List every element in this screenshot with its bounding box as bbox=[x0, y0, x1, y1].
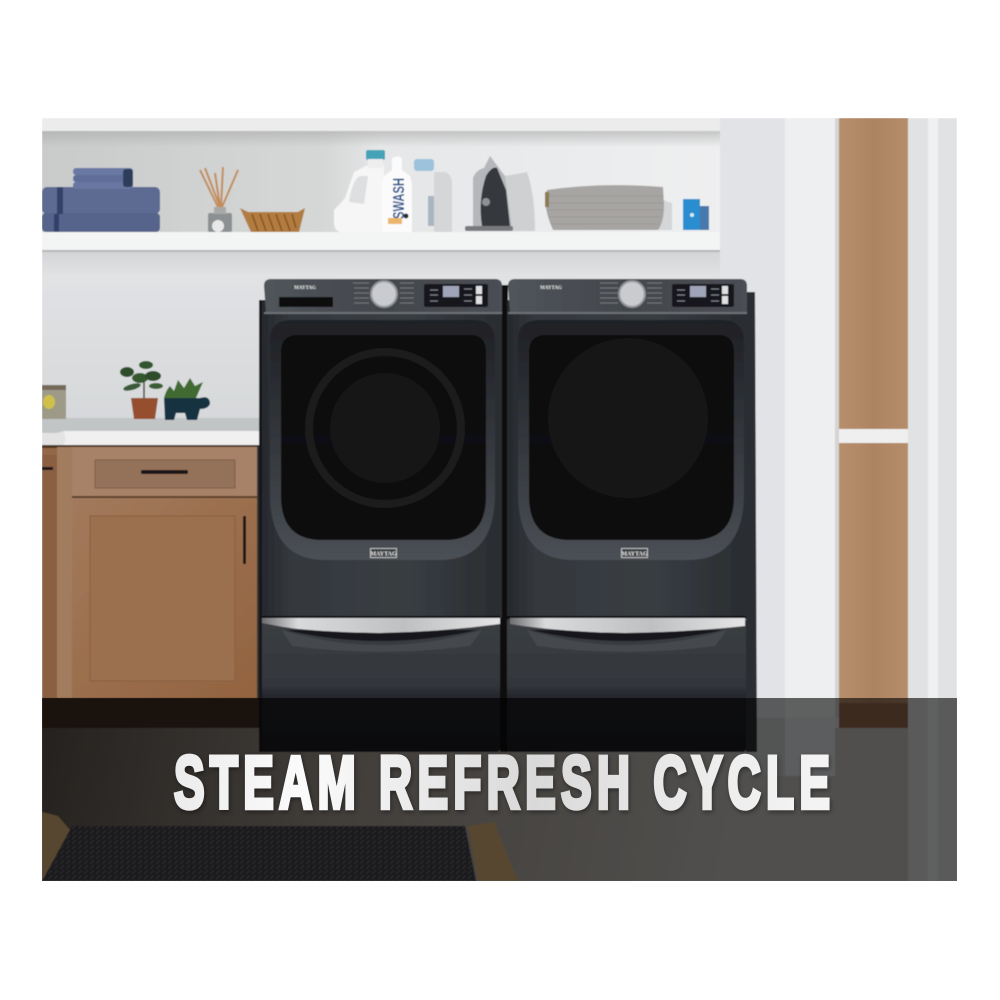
washer door glass bbox=[281, 335, 486, 540]
icon: reed diffuser bbox=[200, 167, 238, 232]
jar bbox=[42, 385, 66, 419]
washer control panel bbox=[264, 279, 502, 314]
shelf bbox=[42, 232, 720, 252]
icon: detergent bottles bbox=[334, 150, 452, 232]
dryer door glass bbox=[529, 335, 734, 540]
icon: clothes iron bbox=[465, 156, 535, 231]
photo background: wall bbox=[42, 118, 957, 881]
floor bbox=[42, 718, 908, 881]
dryer control panel bbox=[508, 279, 747, 314]
dryer badge bbox=[621, 548, 648, 558]
dryer door frame bbox=[518, 320, 744, 560]
icon: blue box bbox=[682, 198, 710, 231]
dryer bbox=[507, 279, 747, 618]
icon: folded towels bbox=[42, 168, 160, 232]
icon: grey basket bbox=[545, 185, 672, 230]
wood lower cabinets bbox=[42, 445, 262, 728]
photo scene bbox=[42, 118, 957, 881]
washer badge: MAYTAG bbox=[370, 552, 397, 558]
icon: woven basket bbox=[240, 208, 305, 232]
dryer control panel: MAYTAG bbox=[540, 286, 562, 291]
washer bbox=[262, 279, 502, 618]
washer body bbox=[262, 300, 502, 618]
appliance cast shadow bbox=[746, 292, 757, 752]
washer door frame bbox=[270, 320, 495, 560]
washer pedestal bbox=[262, 616, 500, 752]
dryer body bbox=[507, 300, 747, 618]
floor rug bbox=[42, 812, 518, 881]
cabinet door bbox=[72, 498, 257, 698]
washer control panel: MAYTAG bbox=[294, 286, 316, 291]
title: STEAM REFRESH CYCLE bbox=[174, 742, 830, 825]
washer badge bbox=[370, 548, 397, 558]
dryer badge: MAYTAG bbox=[621, 552, 648, 558]
icon: detergent bottles: SWASH bbox=[391, 178, 408, 219]
wood tower cabinet bbox=[839, 118, 908, 728]
countertop with plants bbox=[42, 361, 262, 453]
drawer bbox=[72, 447, 257, 496]
dryer pedestal bbox=[507, 616, 746, 752]
dark caption band bbox=[42, 698, 957, 881]
potted plant bbox=[120, 361, 163, 419]
laundry room scene infographic bbox=[42, 118, 957, 881]
hippo planter bbox=[164, 378, 210, 420]
